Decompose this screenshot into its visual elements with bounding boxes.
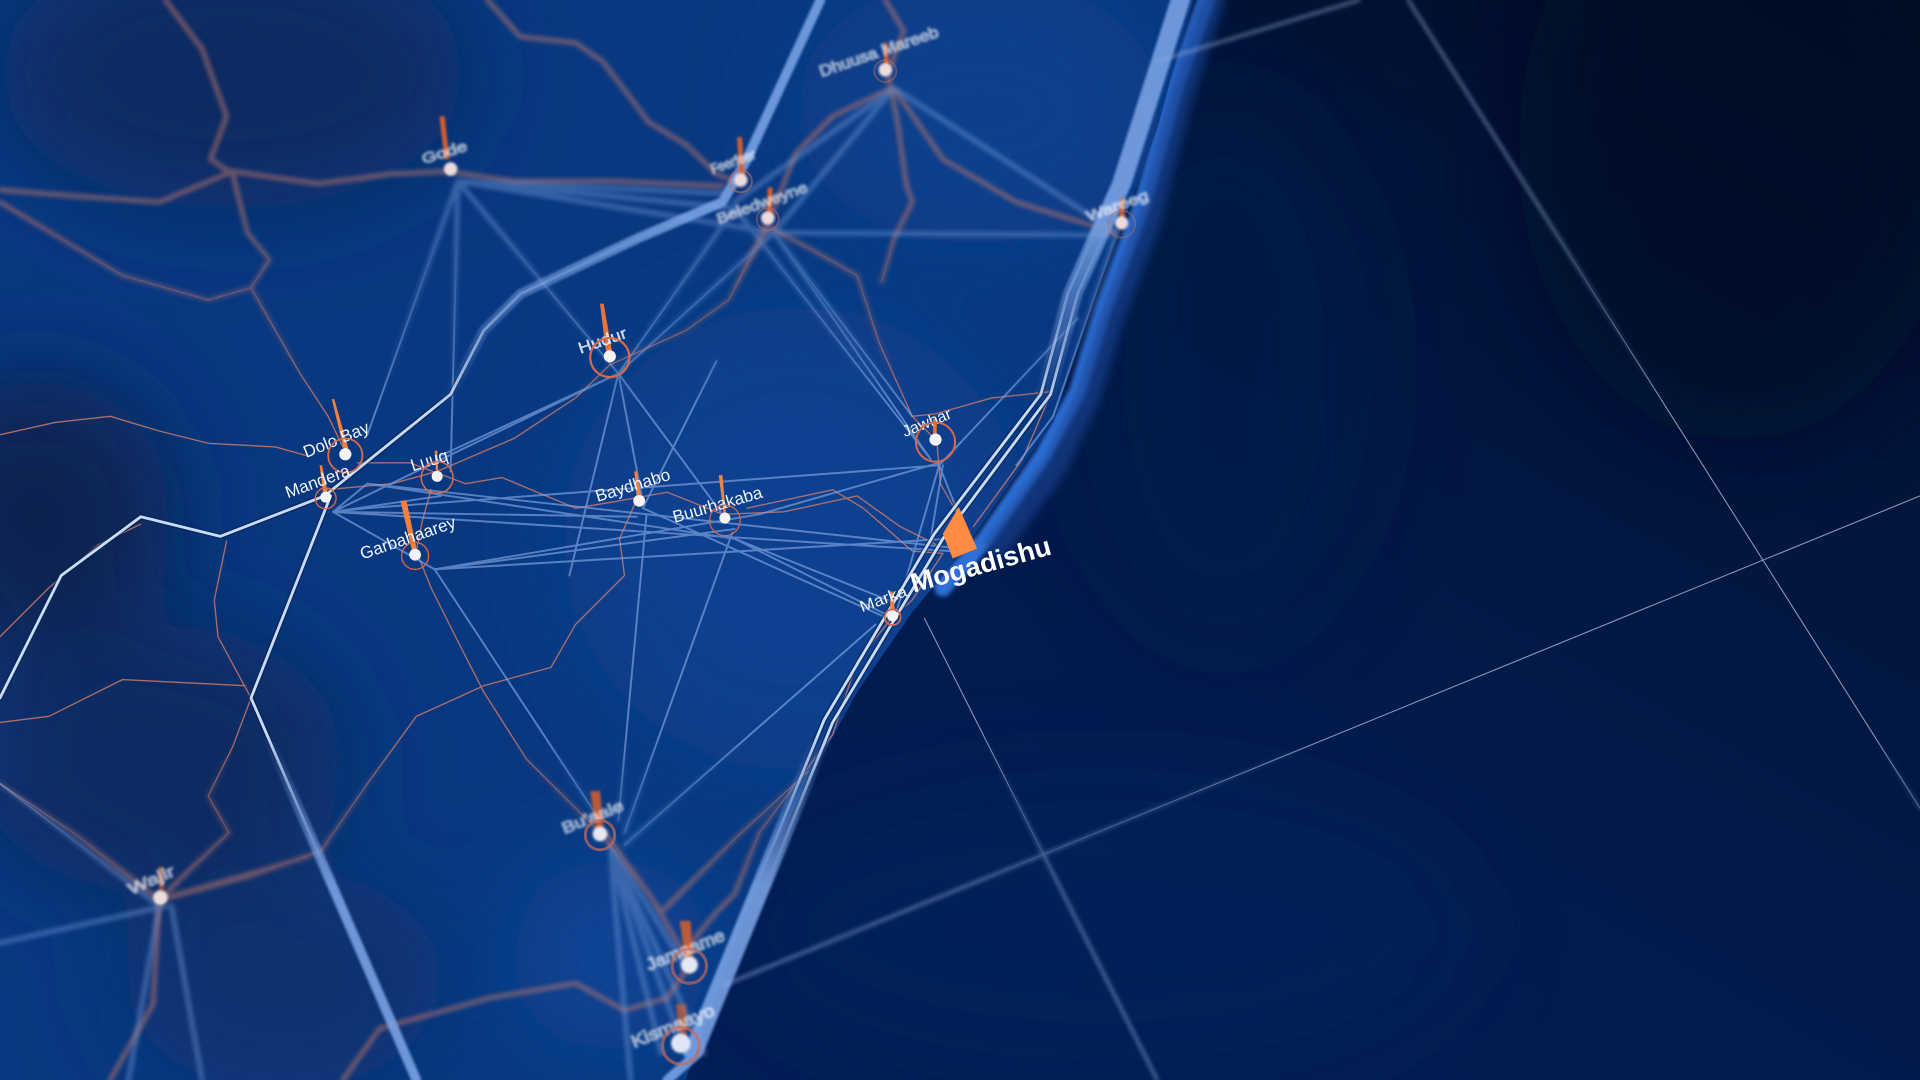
node: Dolo Bay: [300, 399, 372, 473]
node: Luuq: [408, 445, 453, 493]
node: Buaale: [560, 791, 626, 850]
node: Beledweyne: Beledweyne: [715, 180, 810, 228]
node: Luuq: Luuq: [408, 445, 450, 475]
node: Baydhabo: Baydhabo: [593, 464, 672, 506]
node: Jamaame: [643, 921, 728, 983]
node: Dolo Bay: Dolo Bay: [300, 417, 372, 462]
node: Buaale: Bu'aale: [560, 797, 626, 838]
node: Wareeg: Wareeg: [1084, 188, 1151, 225]
node: Jawhar: [900, 406, 955, 462]
node: Feerfeer: [709, 137, 758, 192]
node: Wajir: [126, 863, 178, 905]
orange road network: [0, 0, 1114, 1080]
node: Wajir: Wajir: [126, 863, 178, 899]
node: Jamaame: Jamaame: [643, 925, 728, 975]
node: Jawhar: Jawhar: [900, 406, 955, 441]
node: Kismaayo: Kismaayo: [628, 1000, 718, 1052]
node: Mandera: Mandera: [282, 460, 353, 502]
thick border and coast lines: [0, 0, 1185, 1080]
node: Hudur: Hudur: [576, 325, 630, 358]
coastal glow band: [943, 0, 1212, 588]
land shading: [0, 0, 1163, 1080]
label: Mogadishu: Mogadishu: [907, 531, 1054, 598]
icon: Mogadishu marker: [943, 507, 977, 558]
node: Wareeg: [1084, 188, 1151, 238]
land mass: [0, 0, 1194, 1080]
node: Dhuusa Mareeb: Dhuusa Mareeb: [817, 24, 941, 81]
node: Gode: Gode: [420, 139, 469, 168]
node: Hudur: [576, 304, 630, 377]
node: Kismaayo: [628, 1000, 718, 1064]
node: Marka: Marka: [858, 583, 910, 616]
graticule lines: [722, 0, 1920, 1080]
node: Gode: [420, 116, 469, 176]
blue connection links: [0, 88, 1117, 1080]
node: Feerfeer: Feerfeer: [709, 147, 758, 177]
node: Garbahaarey: Garbahaarey: [357, 512, 459, 563]
node: Marka: [858, 583, 910, 625]
seabed shading: [735, 0, 1920, 1078]
node: Buurhakaba: Buurhakaba: [670, 482, 765, 527]
